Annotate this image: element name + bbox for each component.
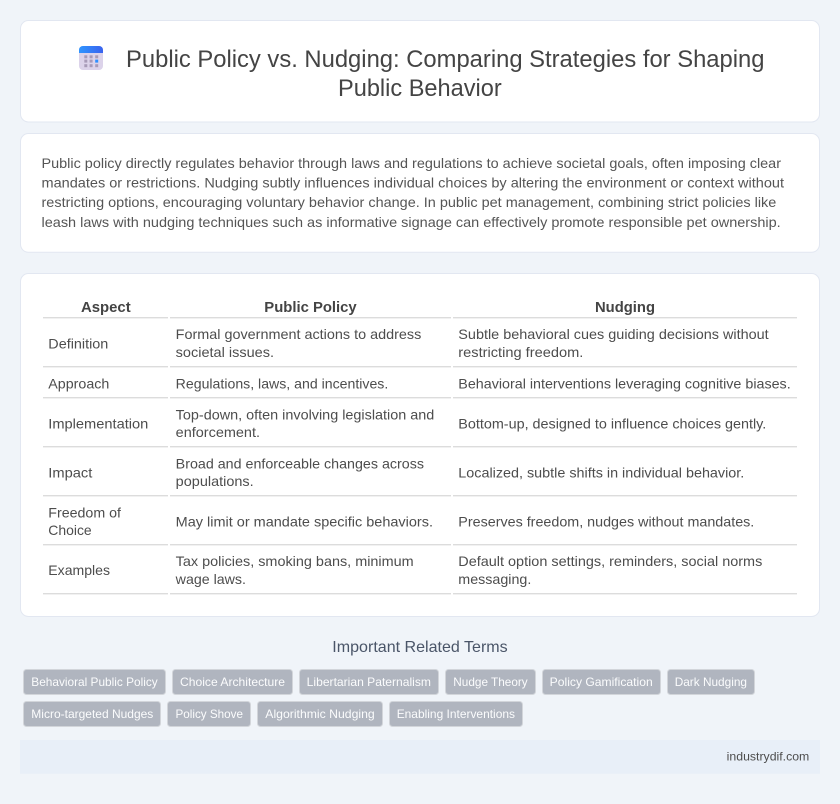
row: approach: Regulations, laws, and incentives. xyxy=(176,375,388,391)
tag: nudge theory: Nudge Theory xyxy=(453,675,528,689)
row: implementation: enforcement. xyxy=(176,424,260,440)
row: implementation: Implementation xyxy=(48,415,148,431)
table header row: Public Policy xyxy=(264,299,357,316)
row: approach: Approach xyxy=(48,375,109,391)
tag: behavioral public policy xyxy=(24,670,166,694)
tag: libertarian paternalism xyxy=(300,670,438,694)
row: definition: Definition xyxy=(48,335,108,351)
row: definition: societal issues. xyxy=(176,344,274,360)
row: examples xyxy=(43,553,797,594)
related term tags xyxy=(24,670,754,726)
intro paragraph: leash laws with nudging techniques such as informative signage can effectively promote responsible pet ownership. xyxy=(42,214,781,230)
row: examples: Tax policies, smoking bans, minimum xyxy=(176,553,414,569)
tag: algorithmic nudging xyxy=(258,702,382,726)
tag: policy gamification: Policy Gamification xyxy=(550,675,653,689)
row: implementation: Bottom-up, designed to influence choices gently. xyxy=(458,415,766,431)
row: examples: Default option settings, reminders, social norms xyxy=(458,553,762,569)
intro paragraph: mandates or restrictions. Nudging subtly influences individual choices by altering the environment or context without xyxy=(42,175,784,191)
title: Public Policy vs. Nudging: Comparing Strategies for Shaping xyxy=(126,46,764,73)
tag: enabling interventions xyxy=(390,702,522,726)
row: definition: restricting freedom. xyxy=(458,344,583,360)
row: definition: Subtle behavioral cues guiding decisions without xyxy=(458,326,769,342)
tag: policy shove xyxy=(168,702,250,726)
footer: industrydif.com xyxy=(727,750,809,764)
table header row: Aspect xyxy=(81,299,131,316)
title xyxy=(126,46,764,102)
row: freedom of choice: Preserves freedom, nudges without mandates. xyxy=(458,513,754,529)
row: impact: populations. xyxy=(176,473,254,489)
row: freedom of choice xyxy=(43,504,797,545)
table header row xyxy=(43,299,797,318)
panel: introduction xyxy=(20,134,820,252)
row: approach: Behavioral interventions leveraging cognitive biases. xyxy=(458,375,791,391)
panel: title header xyxy=(20,20,820,122)
row: examples: wage laws. xyxy=(175,571,246,587)
icon: calendar xyxy=(79,46,103,70)
row: freedom of choice: Choice xyxy=(48,522,92,538)
row: approach xyxy=(43,375,797,398)
heading: important related terms: Important Related Terms xyxy=(332,639,508,656)
row: implementation: Top-down, often involving legislation and xyxy=(176,406,434,422)
tag: choice architecture xyxy=(172,670,292,694)
row: freedom of choice: May limit or mandate specific behaviors. xyxy=(176,513,433,529)
table header row: Nudging xyxy=(595,299,655,316)
tag: nudge theory xyxy=(446,670,536,694)
footer xyxy=(20,740,820,774)
row: impact: Broad and enforceable changes across xyxy=(176,455,424,471)
title: Public Behavior xyxy=(338,75,502,102)
row: definition xyxy=(43,326,797,367)
tag: micro-targeted nudges: Micro-targeted Nudges xyxy=(31,707,153,721)
row: implementation xyxy=(43,406,797,447)
tag: dark nudging xyxy=(668,670,754,694)
tag: policy gamification xyxy=(542,670,660,694)
tag: algorithmic nudging: Algorithmic Nudging xyxy=(265,707,375,721)
row: impact: Impact xyxy=(48,464,92,480)
row: examples: Examples xyxy=(48,562,110,578)
tag: behavioral public policy: Behavioral Public Policy xyxy=(31,675,158,689)
tag: enabling interventions: Enabling Interventions xyxy=(397,707,515,721)
row: impact xyxy=(43,455,797,496)
row: definition: Formal government actions to address xyxy=(176,326,421,342)
row: examples: messaging. xyxy=(458,571,531,587)
intro paragraph xyxy=(42,155,784,230)
tag: policy shove: Policy Shove xyxy=(176,707,243,721)
row: impact: Localized, subtle shifts in individual behavior. xyxy=(458,464,744,480)
intro paragraph: Public policy directly regulates behavior through laws and regulations to achieve societal goals, often imposing clear xyxy=(42,155,781,171)
tag: micro-targeted nudges xyxy=(24,702,160,726)
tag: libertarian paternalism: Libertarian Paternalism xyxy=(307,675,431,689)
intro paragraph: restricting options, encouraging voluntary behavior change. In public pet management, combining strict policies like xyxy=(42,194,777,210)
tag: dark nudging: Dark Nudging xyxy=(675,675,747,689)
tag: choice architecture: Choice Architecture xyxy=(180,675,285,689)
row: freedom of choice: Freedom of xyxy=(48,504,121,520)
panel: comparison table xyxy=(20,274,820,616)
